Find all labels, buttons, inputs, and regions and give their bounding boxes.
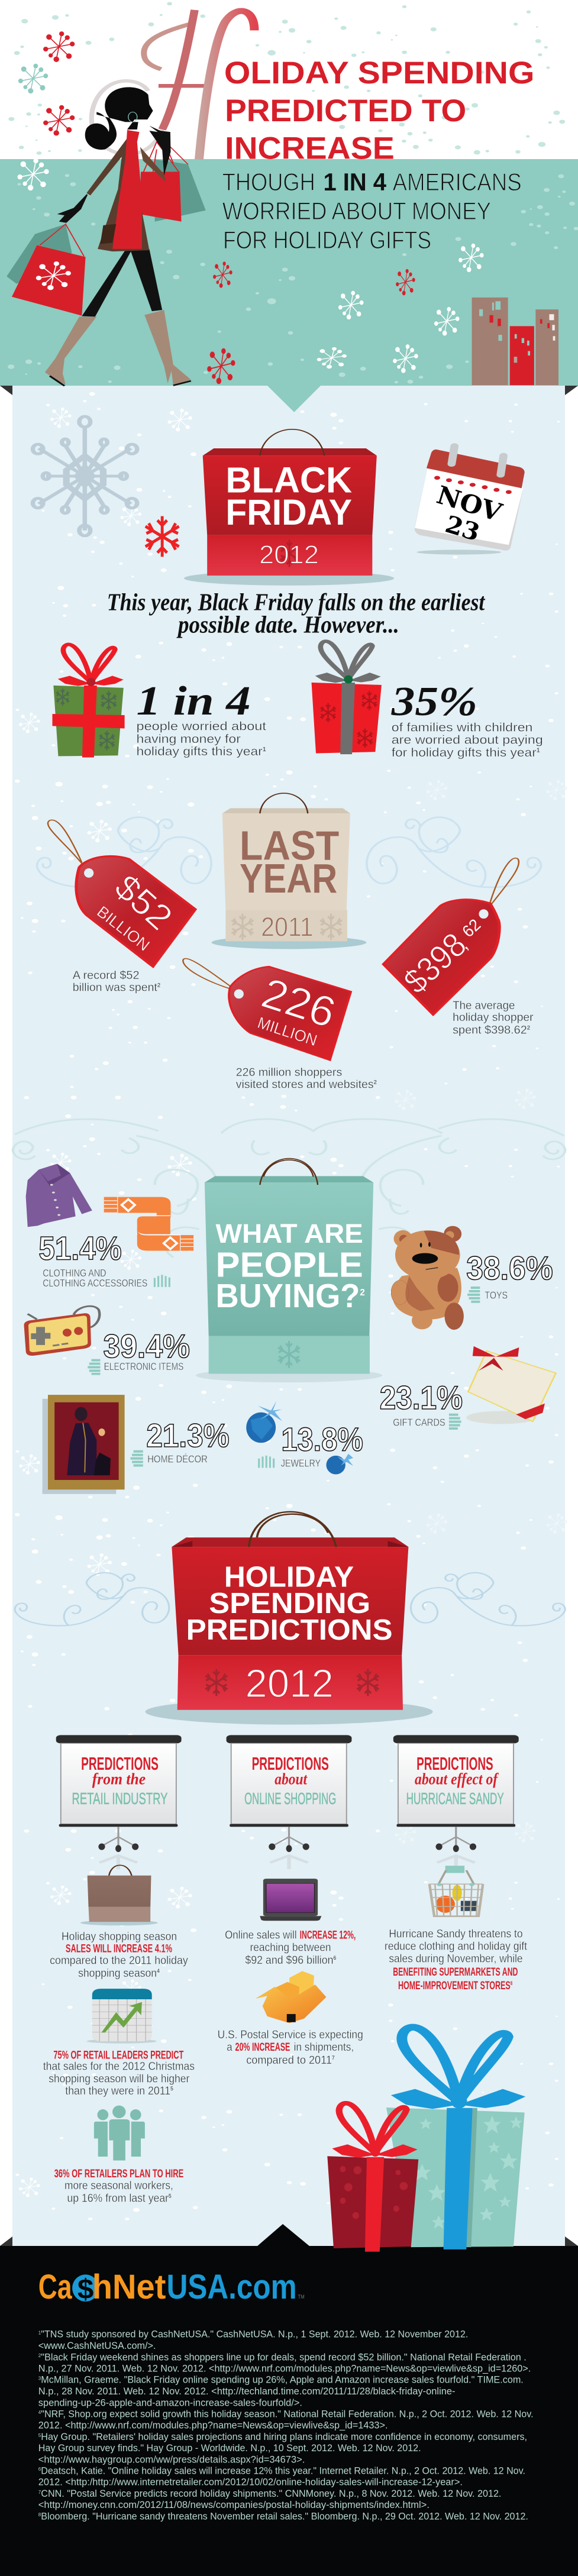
text: online sales xyxy=(225,1929,356,1966)
stat: gift cards 23.1%: GIFT CARDS xyxy=(393,1416,445,1428)
subtitle: 1 IN 4 xyxy=(323,169,386,196)
subtitle: FOR HOLIDAY GIFTS xyxy=(223,227,431,254)
icon: large grey snowflake xyxy=(33,416,137,536)
icon: large blue and teal gift xyxy=(386,2027,525,2249)
price tag shape: 226 xyxy=(183,959,351,1060)
stat: 1 in 4: holiday gifts this year xyxy=(137,745,308,758)
caption: $52 billion: billion was spent xyxy=(73,980,208,994)
references: <www.CashNetUSA.com/>. xyxy=(38,2340,156,2351)
teal band snow dots xyxy=(8,174,578,384)
text: 75% of retail leaders: 5 xyxy=(170,2086,173,2092)
stat: home decor 21.3%: 21.3% xyxy=(146,1418,230,1454)
header snowflakes xyxy=(18,32,483,383)
calendar date: 23 xyxy=(442,510,483,547)
text: postal service: compared to 2011 xyxy=(246,2054,393,2067)
shopping bag: predictions: PREDICTIONS xyxy=(186,1613,393,1646)
icon: blue gem xyxy=(246,1401,282,1443)
caption: 226 million: 226 million shoppers xyxy=(236,1065,342,1078)
shopping bag: Last Year: YEAR xyxy=(240,856,337,901)
buildings xyxy=(472,298,558,385)
text: sales will increase: compared to the 2011 holiday xyxy=(50,1954,188,1967)
references: 2 xyxy=(38,2353,41,2358)
panel: holiday spending predictions section: RETAIL INDUSTRY xyxy=(72,1789,168,1808)
icon: scarf xyxy=(104,1197,193,1251)
panel: holiday spending predictions section: ONLINE SHOPPING xyxy=(244,1789,336,1808)
icon: shipping boxes xyxy=(256,1971,326,2023)
price tag shape: $398.62 xyxy=(383,858,519,1014)
text: postal service: U.S. Postal Service is expecting xyxy=(218,2029,363,2041)
icon: calendar with growth arrow xyxy=(86,1989,157,2044)
stat: 1 in 4: having money for xyxy=(137,732,241,746)
caption: 226 million: visited stores and websites xyxy=(236,1078,456,1091)
header snow dots xyxy=(8,2,565,155)
stat: 1 in 4: 1 xyxy=(263,746,266,752)
text: 36% of retailers: more seasonal workers, xyxy=(64,2179,173,2192)
shopping bag: What are people buying xyxy=(196,1159,382,1382)
caption: 226 million xyxy=(236,1065,377,1091)
stat: 1 in 4: people worried about xyxy=(137,719,266,733)
stat: home decor 21.3% xyxy=(131,1418,230,1466)
shopping bag: What are people buying: 2 xyxy=(360,1287,365,1298)
icon: red gift xyxy=(327,2103,418,2252)
footer: black band xyxy=(0,2224,578,2576)
text: 36% of retailers xyxy=(54,2168,183,2205)
text: 75% of retail leaders: shopping season will be higher xyxy=(49,2073,190,2085)
projection screen: hurricane sandy: about effect of xyxy=(415,1769,499,1788)
tag text: 226 million: MILLION xyxy=(256,1014,319,1049)
logo: CashNetUSA.com: USA.com xyxy=(167,2268,297,2306)
shopping bag: predictions: SPENDING xyxy=(209,1586,370,1620)
decorative swirls xyxy=(15,1573,565,1625)
teal header band xyxy=(0,159,578,386)
caption: $52 billion: 2 xyxy=(157,982,160,988)
stat: electronics 39.4%: 39.4% xyxy=(103,1329,190,1365)
panel: footer content xyxy=(38,2268,534,2522)
logo: CashNetUSA.com: TM xyxy=(298,2294,305,2300)
stat: electronics 39.4%: ELECTRONIC ITEMS xyxy=(104,1360,183,1372)
text: sales will increase: 4 xyxy=(157,1968,160,1974)
decorative swirls xyxy=(37,817,541,887)
text: hurricane sandy: 8 xyxy=(511,1980,512,1986)
calendar date xyxy=(433,480,506,547)
shopping bag: What are people buying: BUYING? xyxy=(216,1276,453,1314)
projection screen: hurricane sandy xyxy=(393,1735,519,1867)
stat: 35%: 1 xyxy=(537,747,540,754)
text: 75% of retail leaders: that sales for the 2012 Christmas xyxy=(43,2060,195,2073)
panel: prediction details: INCREASE 12%, xyxy=(300,1929,356,1941)
icon: sweater xyxy=(26,1163,92,1227)
icon: gift card xyxy=(466,1346,556,1424)
stat: gift cards 23.1%: 23.1% xyxy=(380,1380,463,1416)
text: online sales: reaching between xyxy=(250,1941,331,1954)
text: postal service: in shipments, xyxy=(294,2041,354,2053)
panel: holiday spending predictions section xyxy=(15,1512,565,1869)
icon: people xyxy=(94,2106,145,2161)
references: 5 xyxy=(38,2433,41,2438)
panel: prediction details: 36% OF RETAILERS PLAN TO HIRE xyxy=(54,2168,183,2180)
tag text: $52 billion xyxy=(93,867,180,955)
panel: main light blue body xyxy=(12,386,565,2247)
title xyxy=(224,56,534,166)
shopping bag: Black Friday xyxy=(184,429,394,586)
stat: 35%: 35% xyxy=(391,679,477,725)
subtitle xyxy=(222,169,522,254)
calendar date: NOV xyxy=(433,480,506,528)
tag text: $52 billion: $52 xyxy=(107,867,180,938)
text: 75% of retail leaders: than they were in 2011 xyxy=(65,2085,250,2097)
text: 75% of retail leaders xyxy=(43,2049,195,2097)
stat: home decor 21.3%: HOME DÉCOR xyxy=(147,1453,208,1465)
icon: red gift xyxy=(312,641,382,754)
references: <http://www.haygroup.com/ww/press/details.aspx?id=34673>. xyxy=(38,2454,305,2465)
stat: gift cards 23.1% xyxy=(380,1380,463,1430)
tag text: $398.62: , xyxy=(455,936,472,954)
references: 4 xyxy=(38,2410,41,2415)
references: 3 xyxy=(38,2376,41,2381)
references: 7 xyxy=(38,2490,41,2495)
references: 1 xyxy=(38,2331,41,2336)
text: online sales: Online sales will xyxy=(225,1929,297,1941)
icon: green gift xyxy=(52,644,125,757)
panel: header xyxy=(7,2,578,386)
shopping bag: Black Friday: BLACK xyxy=(225,460,352,500)
shopping bag: What are people buying: PEOPLE xyxy=(216,1245,363,1284)
stat: 1 in 4: 1 in 4 xyxy=(137,678,251,723)
stat: clothing 51.4%: CLOTHING AND xyxy=(43,1267,106,1279)
panel corner folds xyxy=(0,386,578,395)
stat: toys 38.6% xyxy=(466,1250,553,1303)
panel: snow background xyxy=(15,392,567,2221)
panel: prediction details: 75% OF RETAIL LEADERS PREDICT xyxy=(53,2049,183,2061)
stat: electronics 39.4% xyxy=(88,1329,190,1375)
price tag shape: $52 xyxy=(48,820,195,967)
shopping bag: Last Year xyxy=(212,793,366,949)
arrow pointer from header xyxy=(267,386,321,412)
icon: laptop xyxy=(260,1879,321,1921)
decorative script letter H xyxy=(92,10,254,159)
text: 36% of retailers: 5 xyxy=(169,2193,172,2199)
icon: calendar xyxy=(415,446,525,555)
subtitle: THOUGH xyxy=(222,169,315,196)
tag text: $398.62: $398 xyxy=(396,925,474,1001)
panel: prediction details: SALES WILL INCREASE 4.1% xyxy=(66,1942,172,1955)
stat: jewelry 13.8%: JEWELRY xyxy=(281,1457,321,1469)
caption: $398.62: The average xyxy=(453,998,515,1012)
tag text: $398.62: 62 xyxy=(458,915,484,941)
shopping bag: predictions xyxy=(146,1512,433,1725)
title: INCREASE xyxy=(225,131,395,166)
icon: brown shopping bag xyxy=(80,1865,158,1925)
stat: 1 in 4 xyxy=(137,678,266,758)
text: postal service xyxy=(218,2029,363,2067)
decorative teal swirls xyxy=(13,1119,565,1258)
stat: jewelry 13.8% xyxy=(258,1421,363,1475)
logo: CashNetUSA.com xyxy=(38,2268,305,2306)
text: 36% of retailers: up 16% from last year xyxy=(67,2192,246,2205)
stat: clothing 51.4%: 51.4% xyxy=(38,1230,122,1267)
references xyxy=(38,2328,534,2522)
icon: game controller xyxy=(24,1306,99,1356)
title: PREDICTED TO xyxy=(225,93,466,128)
panel: last year section xyxy=(37,793,541,1091)
stat: clothing 51.4%: CLOTHING ACCESSORIES xyxy=(43,1277,147,1289)
text: sales will increase: Holiday shopping season xyxy=(62,1931,177,1942)
text: sales will increase: shopping season xyxy=(78,1967,218,1979)
stat: toys 38.6%: TOYS xyxy=(485,1289,508,1301)
illustration: woman with shopping bags xyxy=(7,87,206,386)
shopping bag: Last Year: LAST xyxy=(240,823,339,869)
references: 6 xyxy=(38,2467,41,2472)
shopping bag: Last Year: 2011 xyxy=(261,912,314,942)
shopping bag: predictions: HOLIDAY xyxy=(224,1560,354,1593)
projection screen: online shopping: PREDICTIONS xyxy=(252,1753,329,1774)
references: spending-up-26-apple-and-amazon-increase-sales-fourfold/>. xyxy=(38,2397,302,2408)
text: postal service: 20% INCREASE xyxy=(235,2041,290,2053)
panel: prediction details xyxy=(43,1865,527,2252)
text: online sales: $92 and $96 billion xyxy=(245,1954,400,1966)
text: sales will increase xyxy=(50,1931,188,1979)
shopping bag: What are people buying: WHAT ARE xyxy=(216,1218,363,1249)
tag text: 226 million: 226 xyxy=(256,969,341,1037)
projection screen: retail industry: PREDICTIONS xyxy=(81,1753,159,1774)
projection screen: online shopping xyxy=(227,1735,351,1869)
logo: CashNetUSA.com: Ca xyxy=(38,2268,72,2306)
icon: small red snowflake xyxy=(146,516,179,557)
shopping bag: Black Friday: 2012 xyxy=(259,540,319,569)
stat: jewelry 13.8%: 13.8% xyxy=(281,1421,363,1458)
caption: $398.62: spent $398.62 xyxy=(453,1023,570,1036)
caption: $52 billion xyxy=(73,968,160,994)
text: postal service: a xyxy=(227,2041,233,2053)
caption: 226 million: 2 xyxy=(374,1079,377,1085)
icon: teddy bear xyxy=(391,1226,464,1330)
stat: clothing 51.4% xyxy=(38,1230,170,1289)
tag text: $52 billion: BILLION xyxy=(93,903,153,955)
logo: CashNetUSA.com: $ xyxy=(78,2273,93,2304)
text: postal service: 7 xyxy=(332,2055,335,2061)
icon: shopping basket xyxy=(430,1866,483,1916)
caption: $398.62: 2 xyxy=(527,1024,530,1031)
stat: 35% xyxy=(391,679,543,759)
intro script text xyxy=(107,589,485,638)
projection screen: online shopping: about xyxy=(275,1769,308,1788)
projection screen: retail industry: from the xyxy=(92,1769,146,1788)
text: hurricane sandy xyxy=(385,1928,527,1992)
caption: $398.62 xyxy=(453,998,534,1036)
projection screen: retail industry xyxy=(56,1735,182,1869)
text: online sales: 6 xyxy=(334,1955,336,1961)
shopping bag: predictions: 2012 xyxy=(245,1661,334,1705)
panel: what are people buying section xyxy=(13,1119,565,1494)
logo: CashNetUSA.com: hNet xyxy=(92,2268,166,2306)
stat: 35%: of families with children xyxy=(392,720,532,734)
caption: $52 billion: A record $52 xyxy=(73,968,140,982)
icon: framed portrait xyxy=(43,1395,125,1494)
shopping bag: Black Friday: FRIDAY xyxy=(225,492,352,532)
intro script text: possible date. However... xyxy=(176,612,399,638)
references: 8 xyxy=(38,2512,41,2517)
panel: black friday section xyxy=(33,386,543,759)
